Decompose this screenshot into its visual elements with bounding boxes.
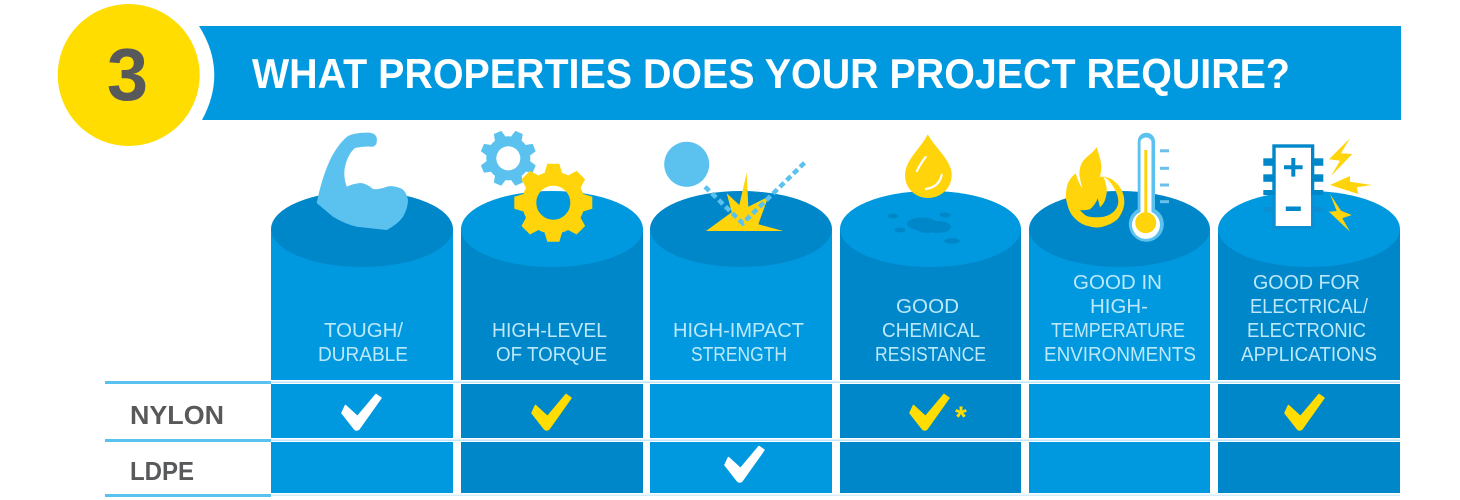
column: good for electrical/electronic applications bbox=[1218, 138, 1400, 380]
label: tough/durable bbox=[318, 320, 408, 366]
label: high-impact strength: HIGH-IMPACT bbox=[673, 320, 804, 342]
check: nylon tough bbox=[342, 394, 381, 430]
row: ldpe: LDPE bbox=[130, 456, 194, 486]
label: tough/durable: TOUGH/ bbox=[324, 320, 403, 342]
icon: impact ball and burst bbox=[664, 142, 805, 231]
icon: flame bbox=[1066, 147, 1124, 228]
label: good chemical resistance: CHEMICAL bbox=[882, 320, 980, 342]
chemical stain spots bbox=[888, 212, 960, 244]
label: good for electrical/electronic applications bbox=[1241, 272, 1377, 366]
check: ldpe impact bbox=[725, 446, 764, 482]
label: high-level of torque: OF TORQUE bbox=[496, 344, 607, 366]
label: tough/durable: DURABLE bbox=[318, 344, 408, 366]
icon: lightning bolts bbox=[1329, 138, 1372, 232]
icon: electronic chip bbox=[1263, 144, 1323, 229]
column: tough/durable bbox=[271, 133, 453, 380]
label: good in high-temperature environments: ENVIRONMENTS bbox=[1044, 344, 1196, 366]
title banner: WHAT PROPERTIES DOES YOUR PROJECT REQUIRE? bbox=[252, 50, 1290, 97]
label: good chemical resistance bbox=[875, 296, 986, 366]
label: good for electrical/electronic applications: GOOD FOR bbox=[1253, 272, 1360, 294]
label: good for electrical/electronic applications: ELECTRICAL/ bbox=[1250, 296, 1368, 318]
label: good for electrical/electronic applications: ELECTRONIC bbox=[1247, 320, 1366, 342]
label: good in high-temperature environments: TEMPERATURE bbox=[1051, 320, 1185, 342]
icon: yellow gear bbox=[514, 164, 592, 242]
check: nylon torque bbox=[532, 394, 571, 430]
label: good chemical resistance: GOOD bbox=[896, 296, 959, 318]
title banner bbox=[199, 26, 1401, 120]
check: nylon electrical bbox=[1285, 394, 1324, 430]
icon: flexed arm bbox=[317, 133, 408, 230]
check: nylon chemical bbox=[910, 394, 949, 430]
label: high-level of torque: HIGH-LEVEL bbox=[492, 320, 607, 342]
label: high-impact strength bbox=[673, 320, 804, 366]
column: high-impact strength bbox=[650, 142, 832, 380]
icon: yellow drop bbox=[905, 134, 952, 198]
label: good in high-temperature environments bbox=[1044, 272, 1196, 366]
label: good in high-temperature environments: HIGH- bbox=[1090, 296, 1148, 318]
label: high-level of torque bbox=[492, 320, 607, 366]
row: nylon bbox=[105, 381, 1400, 438]
label: high-impact strength: STRENGTH bbox=[691, 344, 787, 366]
label: good for electrical/electronic applications: APPLICATIONS bbox=[1241, 344, 1377, 366]
number badge bbox=[58, 4, 200, 146]
label: good in high-temperature environments: GOOD IN bbox=[1073, 272, 1162, 294]
row: nylon: NYLON bbox=[130, 400, 224, 430]
icon: thermometer bbox=[1129, 133, 1169, 242]
asterisk: * bbox=[955, 401, 967, 434]
icon: blue gear bbox=[472, 122, 545, 195]
number badge: 3 bbox=[107, 33, 148, 116]
column: good chemical resistance bbox=[840, 134, 1021, 380]
row: ldpe bbox=[105, 439, 1400, 497]
column: good in high-temperature environments bbox=[1029, 133, 1210, 380]
column: high-level of torque bbox=[461, 122, 643, 380]
label: good chemical resistance: RESISTANCE bbox=[875, 344, 986, 366]
